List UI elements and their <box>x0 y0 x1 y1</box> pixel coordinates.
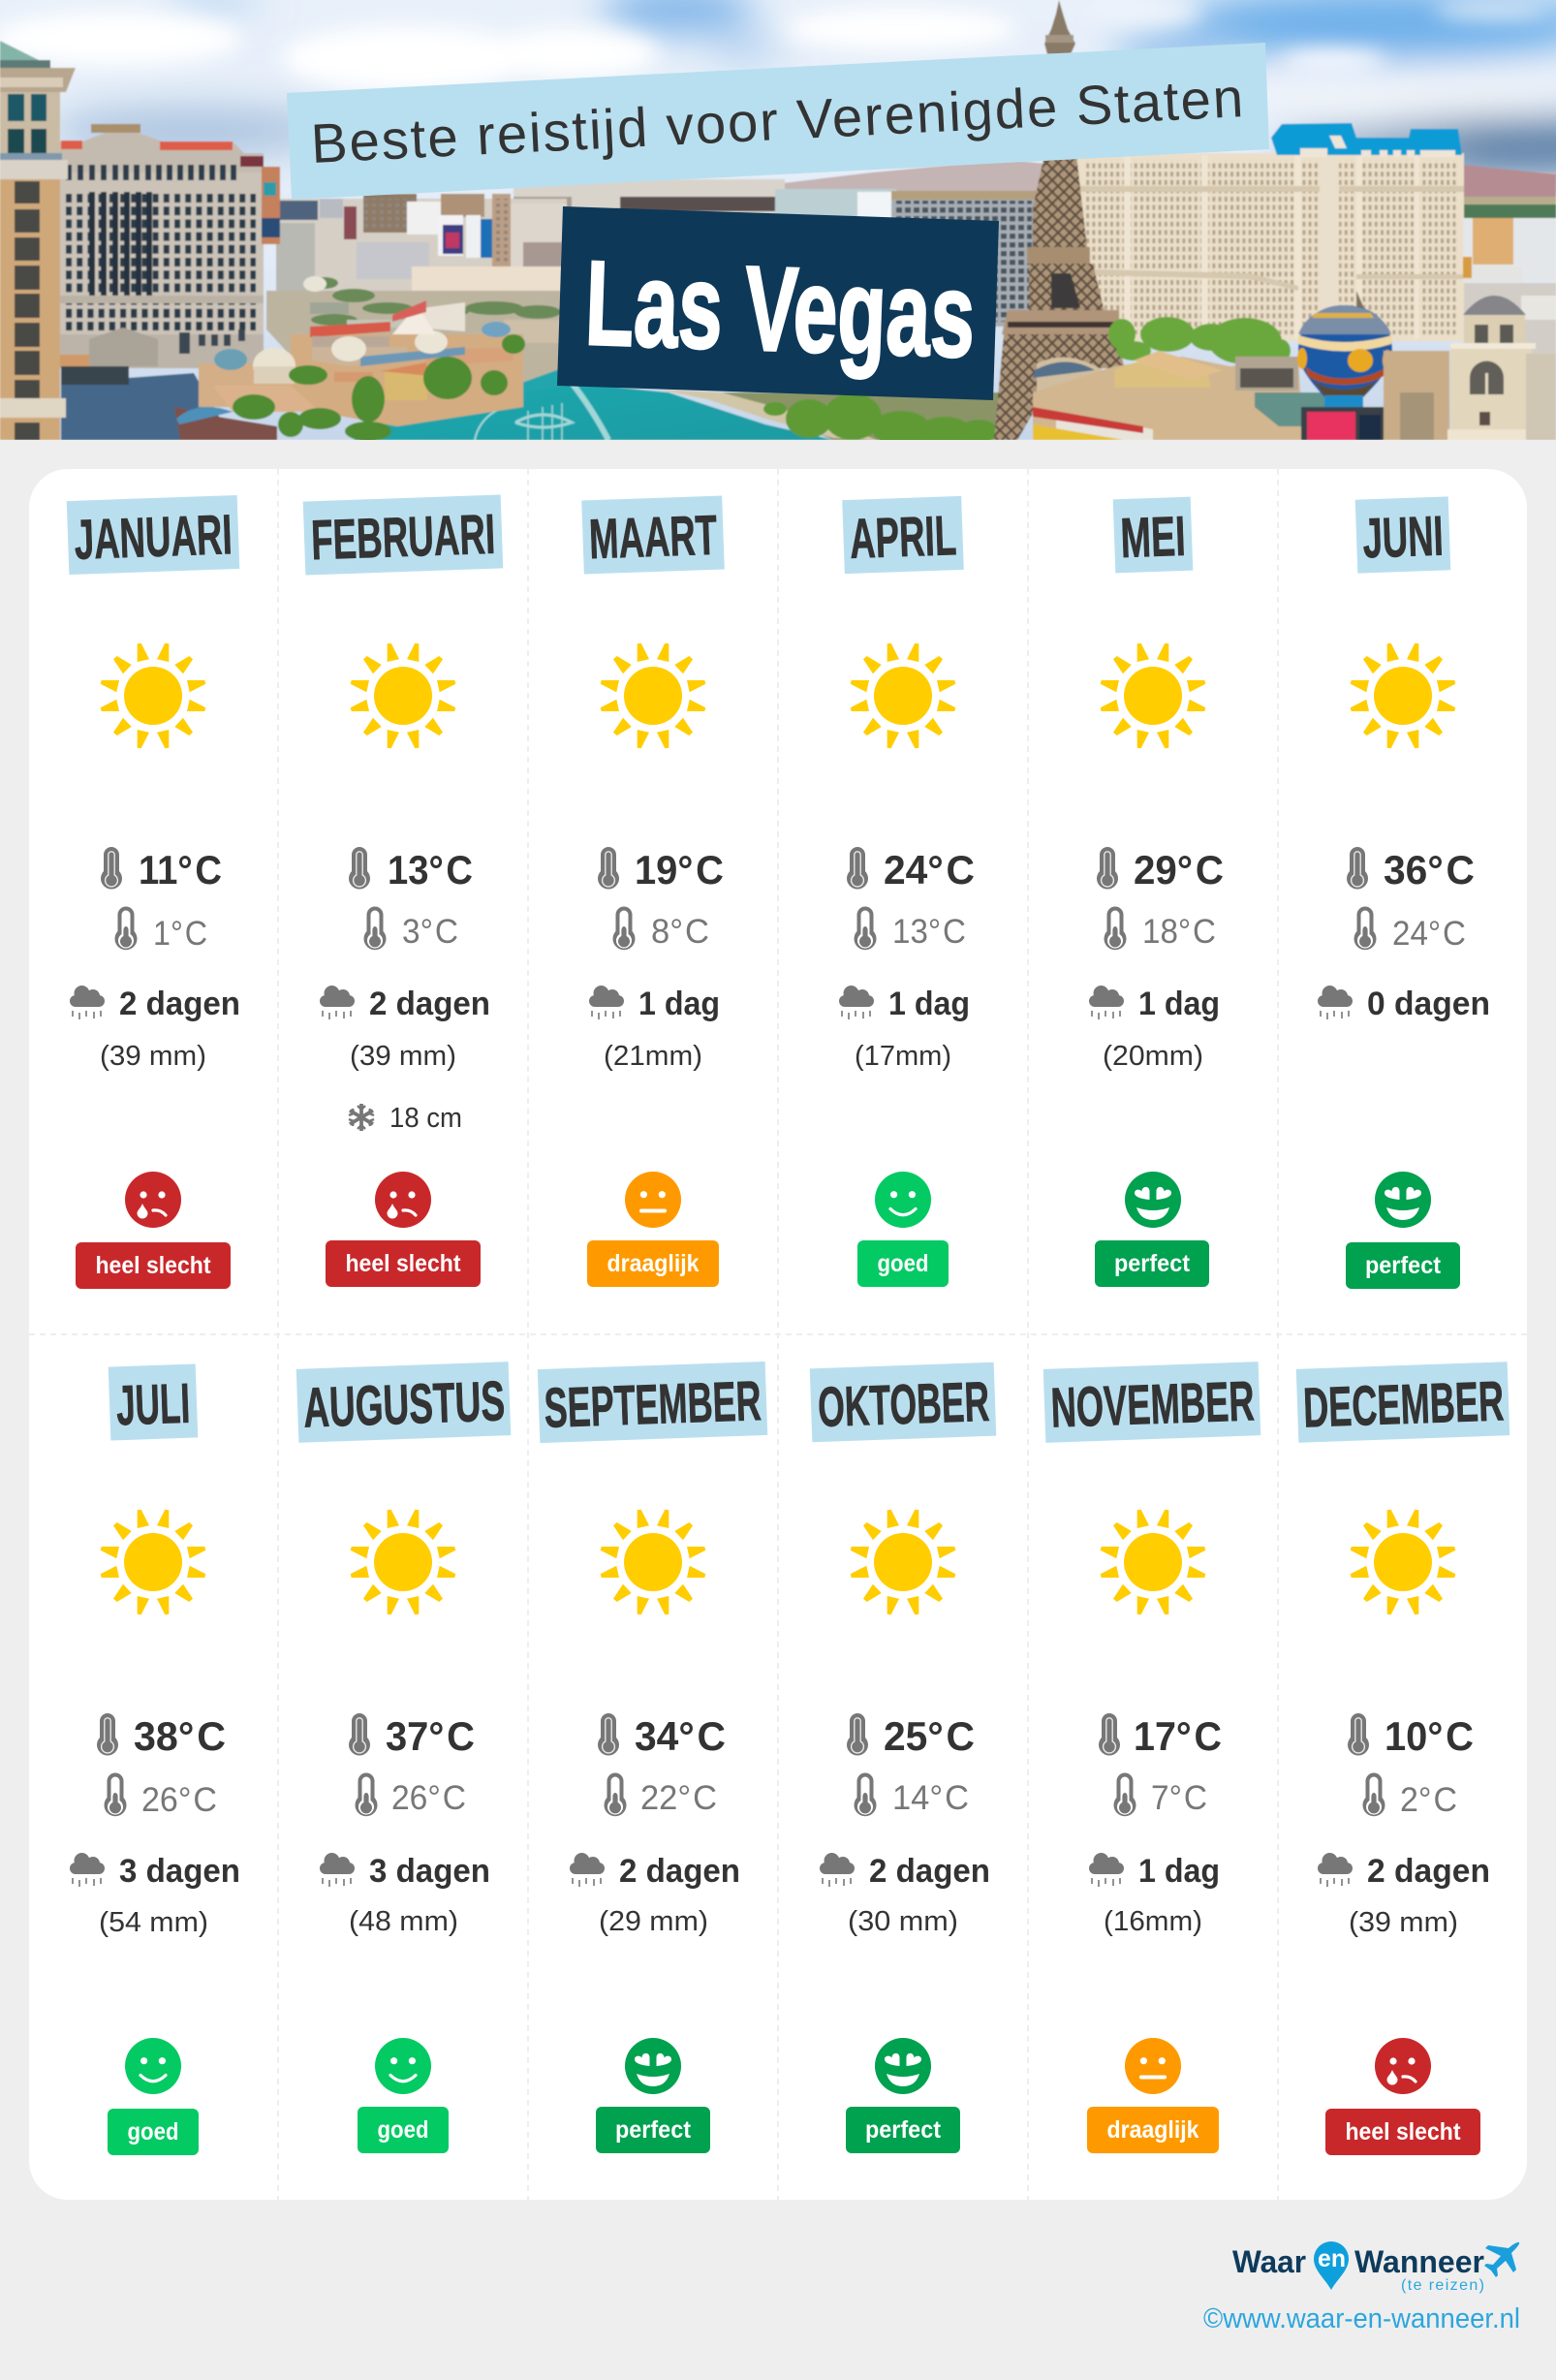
panel: juli <box>70 1363 240 2155</box>
icon: thermometer high <box>1347 847 1368 890</box>
logo: Waar en Wanneer: en <box>1318 2245 1346 2272</box>
icon: rain cloud <box>70 1853 105 1887</box>
trees behind casino <box>1108 317 1291 364</box>
city name text: Las Vegas <box>583 236 977 383</box>
icon: thermometer low <box>364 907 386 950</box>
max temperature: 36°C <box>1384 847 1475 892</box>
rating badge <box>358 2107 449 2153</box>
white calendar card <box>29 469 1527 2200</box>
icon: sun <box>351 1510 455 1614</box>
max temperature: 10°C <box>1385 1713 1474 1759</box>
rainfall: (16mm) <box>1104 1906 1202 1937</box>
strip buildings left of dark panel <box>276 199 567 296</box>
rating badge <box>596 2107 710 2153</box>
month label <box>67 495 239 575</box>
max temperature: 38°C <box>134 1713 226 1759</box>
snowfall: 18 cm <box>389 1103 462 1134</box>
rating badge: perfect <box>865 2116 942 2144</box>
icon: thermometer low <box>1114 1773 1136 1816</box>
month label: MAART <box>588 504 718 571</box>
icon: face perfect <box>875 2038 931 2094</box>
rainfall: (39 mm) <box>100 1041 206 1072</box>
month label: FEBRUARI <box>310 503 496 572</box>
rating badge: goed <box>878 1250 928 1277</box>
icon: sun <box>1351 1510 1455 1614</box>
panel: oktober <box>810 1362 996 2153</box>
month label <box>1043 1362 1260 1443</box>
icon: rain cloud <box>1318 1853 1353 1887</box>
rating badge: perfect <box>615 2116 692 2144</box>
min temperature: 2°C <box>1400 1781 1457 1819</box>
icon: rain cloud <box>570 1853 605 1887</box>
rain days: 0 dagen <box>1367 986 1490 1022</box>
logo: Waar en Wanneer: Wanneer <box>1354 2244 1484 2279</box>
max temperature: 17°C <box>1134 1713 1222 1759</box>
icon: thermometer high <box>847 1713 868 1756</box>
bell tower <box>1447 296 1556 440</box>
icon: face heel slecht <box>375 1172 431 1228</box>
min temperature: 7°C <box>1151 1779 1207 1817</box>
mountains <box>784 161 1556 192</box>
panel: december <box>1296 1362 1509 2155</box>
icon: plane <box>1484 2242 1519 2277</box>
left foreground tower <box>0 41 76 440</box>
icon: sun <box>1101 1510 1205 1614</box>
Paris blue roof <box>1271 123 1462 155</box>
icon: rain cloud <box>1089 986 1124 1019</box>
icon: rain cloud <box>320 986 355 1019</box>
icon: thermometer high <box>847 847 868 890</box>
icon: rain cloud <box>1089 1853 1124 1887</box>
far buildings middle <box>513 178 785 213</box>
rating badge <box>857 1240 949 1287</box>
max temperature: 34°C <box>635 1713 726 1759</box>
website url: ©www.waar-en-wanneer.nl <box>1203 2303 1520 2334</box>
icon: face heel slecht <box>1375 2038 1431 2094</box>
min temperature: 26°C <box>141 1781 217 1819</box>
rating badge: draaglijk <box>1106 2116 1199 2144</box>
Eiffel tower replica <box>994 0 1124 440</box>
rain days: 2 dagen <box>619 1853 740 1890</box>
icon: thermometer low <box>855 907 876 950</box>
Paris casino front <box>1033 357 1303 440</box>
rating badge <box>587 1240 719 1287</box>
month label: APRIL <box>849 504 957 571</box>
min temperature: 26°C <box>391 1779 466 1817</box>
rating badge <box>846 2107 960 2153</box>
panel: september <box>538 1362 767 2153</box>
rating badge: goed <box>128 2118 178 2145</box>
rainfall: (54 mm) <box>99 1907 208 1938</box>
min temperature: 1°C <box>153 915 207 953</box>
rating badge <box>1346 1242 1460 1289</box>
icon: thermometer low <box>114 907 138 950</box>
icon: sun <box>851 643 955 748</box>
month label: JUNI <box>1361 505 1445 570</box>
month label: JULI <box>115 1372 191 1437</box>
month label <box>581 495 725 575</box>
max temperature: 19°C <box>635 847 724 892</box>
icon: thermometer low <box>1354 907 1376 950</box>
rain days: 2 dagen <box>1367 1853 1490 1890</box>
rain days: 2 dagen <box>119 986 240 1022</box>
logo: Waar en Wanneer: (te reizen) <box>1401 2277 1484 2294</box>
rating badge <box>108 2109 199 2155</box>
icon: face perfect <box>625 2038 681 2094</box>
panel: maart <box>581 495 725 1287</box>
Arc and tower right <box>1384 351 1449 440</box>
month label: MEI <box>1119 505 1187 570</box>
panel: augustus <box>296 1362 511 2153</box>
panel: mei <box>1089 497 1224 1287</box>
logo: Waar en Wanneer <box>1232 2241 1519 2294</box>
rating badge: heel slecht <box>345 1250 461 1277</box>
month label <box>1113 497 1193 573</box>
month label <box>810 1362 996 1442</box>
rating badge: draaglijk <box>607 1250 700 1277</box>
month label <box>109 1363 198 1441</box>
rating badge: heel slecht <box>1345 2118 1461 2145</box>
icon: face draaglijk <box>625 1172 681 1228</box>
rain days: 2 dagen <box>369 986 490 1022</box>
Caesars Palace tower <box>59 172 264 335</box>
icon: thermometer high <box>1348 1713 1369 1756</box>
rainfall: (20mm) <box>1103 1041 1203 1072</box>
min temperature: 24°C <box>1392 915 1466 953</box>
panel: februari <box>303 494 503 1287</box>
rainfall: (30 mm) <box>848 1906 958 1937</box>
max temperature: 13°C <box>388 847 473 892</box>
header photo: Las Vegas skyline <box>0 0 1556 448</box>
rating badge: perfect <box>1114 1250 1191 1277</box>
rating badge <box>76 1242 231 1289</box>
icon: thermometer low <box>355 1773 378 1816</box>
rain days: 1 dag <box>888 986 970 1022</box>
icon: thermometer high <box>1097 847 1118 890</box>
icon: face goed <box>125 2038 181 2094</box>
rainfall: (21mm) <box>604 1041 702 1072</box>
icon: thermometer high <box>598 847 619 890</box>
icon: face perfect <box>1375 1172 1431 1228</box>
rain days: 1 dag <box>1138 1853 1220 1890</box>
icon: face goed <box>375 2038 431 2094</box>
icon: face goed <box>875 1172 931 1228</box>
Montgolfier balloon <box>1297 305 1392 412</box>
icon: rain cloud <box>839 986 874 1019</box>
rating badge: goed <box>378 2116 428 2144</box>
rain days: 3 dagen <box>119 1853 240 1890</box>
month label: JANUARI <box>74 503 233 572</box>
icon: thermometer high <box>1099 1713 1120 1756</box>
rating badge <box>1095 1240 1209 1287</box>
icon: face perfect <box>1125 1172 1181 1228</box>
rainfall: (39 mm) <box>350 1041 456 1072</box>
lake <box>354 368 833 440</box>
rating badge: perfect <box>1365 1252 1442 1279</box>
icon: sun <box>601 643 705 748</box>
title band <box>287 43 1269 200</box>
rain days: 3 dagen <box>369 1853 490 1890</box>
panel: april <box>839 496 975 1287</box>
strip and gardens <box>266 291 567 388</box>
icon: thermometer high <box>349 847 370 890</box>
rating badge <box>1087 2107 1219 2153</box>
icon: thermometer low <box>605 1773 626 1816</box>
icon: rain cloud <box>70 986 105 1019</box>
max temperature: 29°C <box>1134 847 1224 892</box>
month label: SEPTEMBER <box>544 1369 762 1440</box>
month label: NOVEMBER <box>1050 1369 1256 1440</box>
icon: sun <box>1351 643 1455 748</box>
min temperature: 14°C <box>892 1779 969 1817</box>
month label: AUGUSTUS <box>302 1369 506 1440</box>
month label <box>1355 496 1450 574</box>
icon: thermometer low <box>1105 907 1126 950</box>
rainfall: (17mm) <box>855 1041 951 1072</box>
Bellagio roofs and domes <box>198 362 292 409</box>
min temperature: 22°C <box>640 1779 717 1817</box>
max temperature: 37°C <box>386 1713 475 1759</box>
month label <box>303 494 503 576</box>
panel: juni <box>1318 496 1490 1289</box>
icon: face draaglijk <box>1125 2038 1181 2094</box>
max temperature: 25°C <box>884 1713 975 1759</box>
icon: thermometer low <box>105 1773 126 1816</box>
icon: thermometer low <box>1362 1773 1385 1816</box>
rainfall: (48 mm) <box>349 1906 458 1937</box>
rating badge: heel slecht <box>95 1252 211 1279</box>
icon: thermometer high <box>349 1713 370 1756</box>
max temperature: 24°C <box>884 847 975 892</box>
month label <box>842 496 964 574</box>
icon: rain cloud <box>320 1853 355 1887</box>
icon: sun <box>101 1510 205 1614</box>
min temperature: 3°C <box>402 913 458 951</box>
Paris hotel <box>1076 153 1464 341</box>
casino sign base <box>1301 407 1384 440</box>
rainfall: (39 mm) <box>1349 1907 1458 1938</box>
panel: november <box>1043 1362 1260 2153</box>
min temperature: 8°C <box>651 913 709 951</box>
icon: thermometer low <box>855 1773 876 1816</box>
plaza <box>61 373 233 440</box>
icon: sun <box>1101 643 1205 748</box>
rainfall: (29 mm) <box>599 1906 708 1937</box>
rating badge <box>1325 2109 1480 2155</box>
rain days: 1 dag <box>1138 986 1220 1022</box>
month label <box>296 1362 511 1443</box>
month label <box>538 1362 767 1443</box>
panel: januari <box>67 495 240 1289</box>
Bellagio shoreline and trees <box>723 391 1000 440</box>
icon: face heel slecht <box>125 1172 181 1228</box>
icon: rain cloud <box>589 986 624 1019</box>
icon: rain cloud <box>1318 986 1353 1019</box>
icon: sun <box>101 643 205 748</box>
city name panel <box>557 206 999 400</box>
icon: thermometer high <box>598 1713 619 1756</box>
icon: thermometer high <box>97 1713 118 1756</box>
rain days: 2 dagen <box>869 1853 990 1890</box>
min temperature: 13°C <box>892 913 966 951</box>
rain days: 1 dag <box>638 986 720 1022</box>
icon: rain cloud <box>820 1853 855 1887</box>
month label: OKTOBER <box>817 1370 990 1439</box>
icon: sun <box>601 1510 705 1614</box>
max temperature: 11°C <box>139 847 222 892</box>
rating badge <box>326 1240 481 1287</box>
logo: Waar en Wanneer: Waar <box>1232 2244 1306 2279</box>
min temperature: 18°C <box>1142 913 1216 951</box>
icon: sun <box>351 643 455 748</box>
icon: sun <box>851 1510 955 1614</box>
icon: snowflake <box>349 1104 374 1131</box>
icon: map pin <box>1314 2241 1349 2290</box>
icon: thermometer low <box>612 907 636 950</box>
icon: thermometer high <box>101 847 122 890</box>
title text: Beste reistijd voor Verenigde Staten <box>309 67 1246 175</box>
